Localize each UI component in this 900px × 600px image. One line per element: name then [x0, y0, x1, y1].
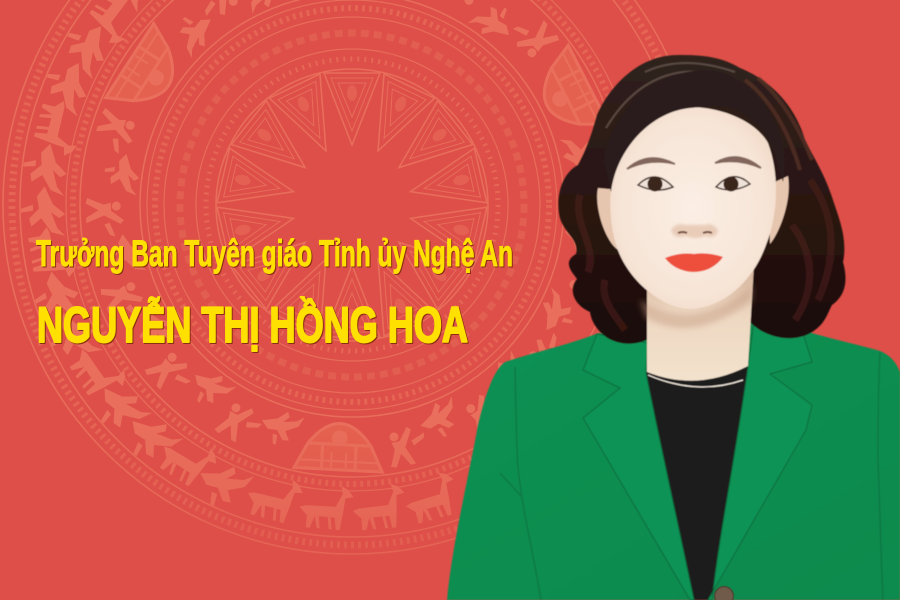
face [610, 107, 776, 309]
job title: Trưởng Ban Tuyên giáo Tỉnh ủy Nghệ An [36, 233, 513, 274]
person name: NGUYỄN THỊ HỒNG HOA [37, 297, 468, 353]
heading text [36, 233, 513, 353]
blouse neckline [648, 375, 743, 387]
nose [671, 224, 718, 238]
portrait [447, 55, 900, 600]
jacket [447, 320, 900, 600]
lips [665, 253, 723, 272]
eyes [638, 176, 750, 192]
star petals [217, 73, 487, 337]
bronze drum pattern [3, 0, 701, 554]
black blouse [646, 366, 750, 600]
chin shadow [640, 285, 752, 328]
inner motif ring [85, 0, 619, 472]
eyebrows [627, 157, 761, 169]
ears [597, 176, 789, 250]
neck [647, 265, 754, 381]
right lapel [708, 320, 812, 600]
outer animal ring [20, 0, 652, 531]
hair fringe [604, 70, 785, 192]
button [714, 586, 734, 600]
left lapel [583, 334, 694, 600]
hair [558, 55, 845, 344]
drum rings [3, 0, 701, 554]
